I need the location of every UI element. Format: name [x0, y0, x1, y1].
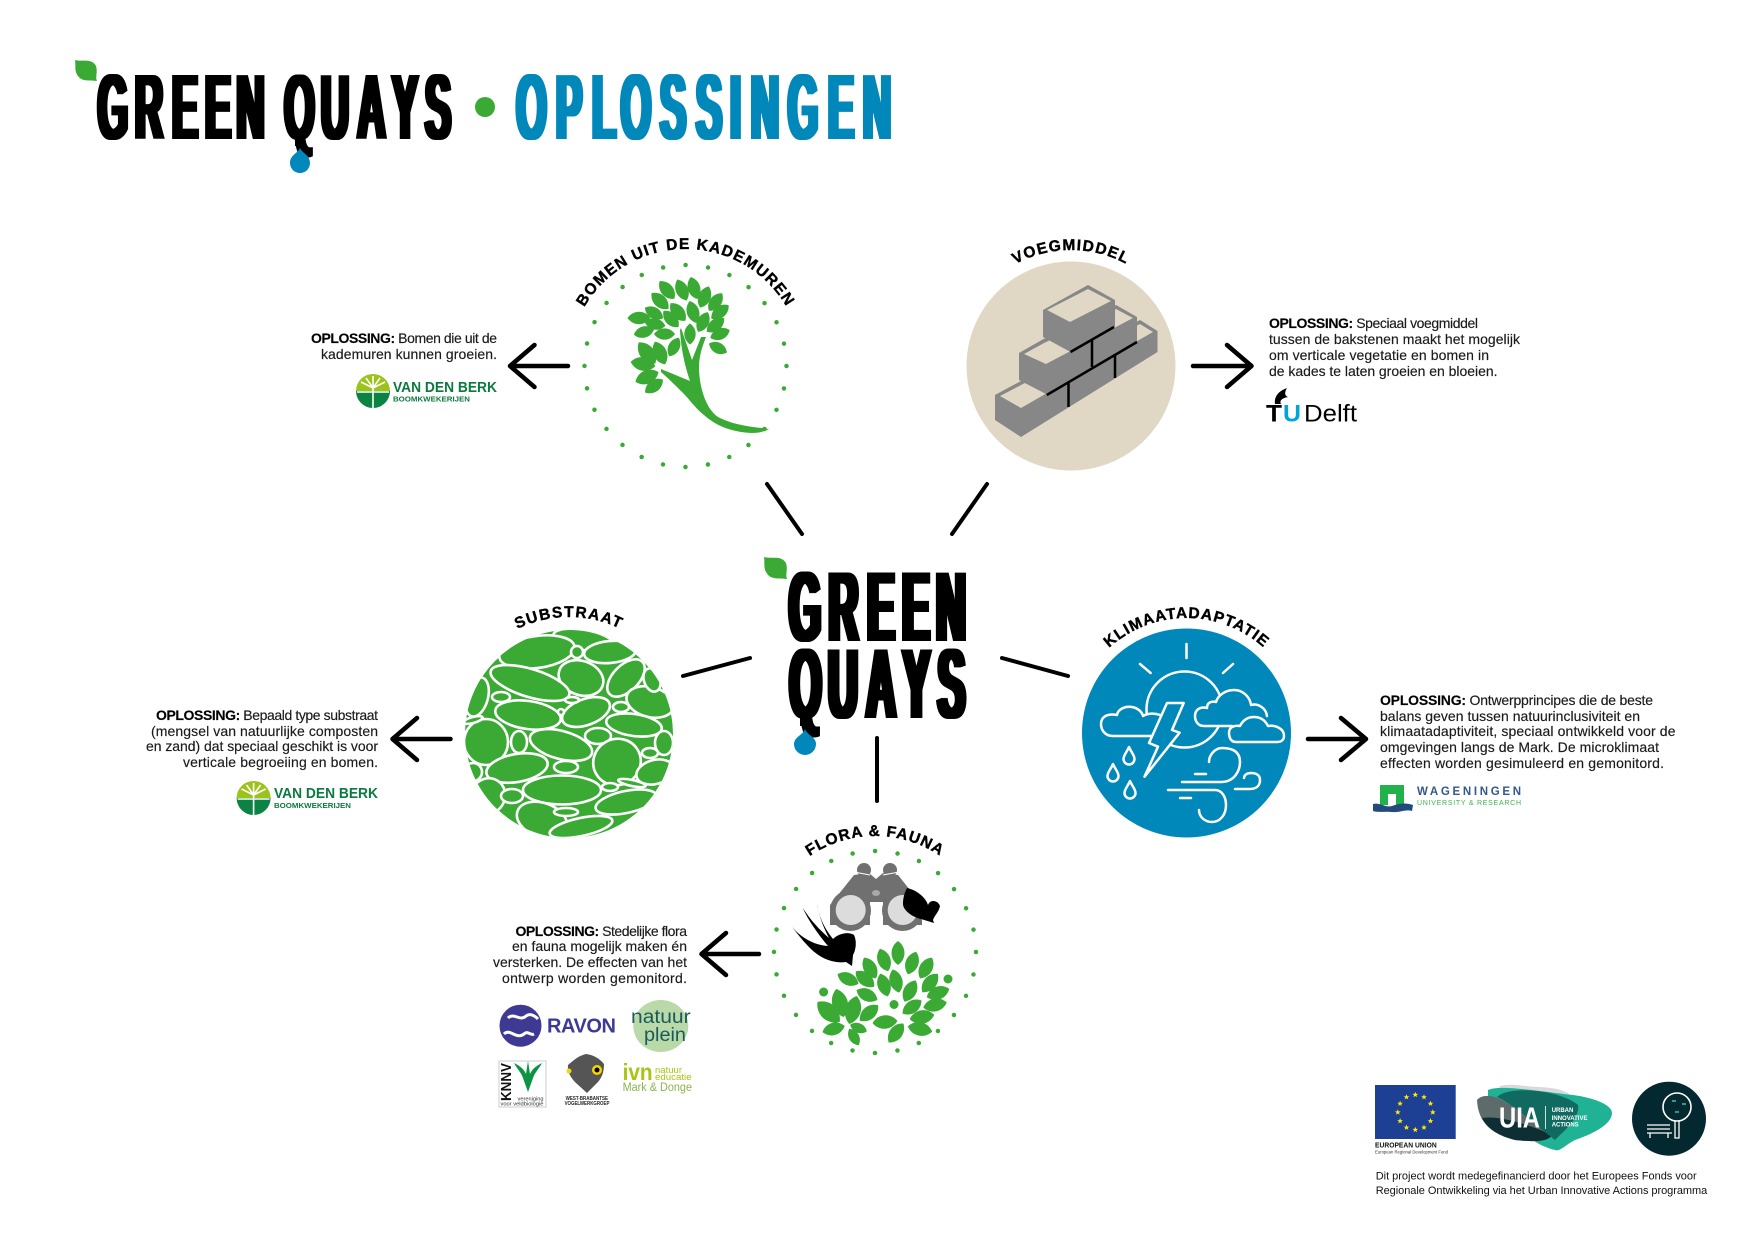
Q stem: [800, 716, 810, 726]
Q stem: [295, 137, 303, 146]
logo: Van den Berk: [356, 374, 497, 408]
icon: brick wall: [995, 285, 1158, 437]
icon: tree: [628, 275, 769, 433]
panel: voegmiddel: [966, 239, 1521, 470]
word: Green: GREEN: [789, 552, 966, 663]
footer text: Dit project wordt medegefinancierd door het Europees Fonds voor: [1376, 1170, 1697, 1182]
footer text: Regionale Ontwikkeling via het Urban Innovative Actions programma: [1376, 1185, 1708, 1197]
text block: kademuren kunnen groeien.: [321, 346, 497, 362]
logo: Wageningen: [1373, 785, 1521, 812]
text block: balans geven tussen natuurinclusiviteit en: [1380, 708, 1640, 724]
text block: [311, 330, 497, 362]
title: Green Quays Oplossingen: [75, 56, 891, 173]
heading: Oplossingen: OPLOSSINGEN: [516, 56, 891, 160]
logo: Natuurplein: plein: [644, 1025, 686, 1046]
text block: [1269, 315, 1521, 379]
text block: [146, 707, 378, 770]
logo: UIA: UIA: [1499, 1103, 1540, 1135]
heading: KLIMAATADAPTATIE: [1102, 607, 1270, 648]
heading: SUBSTRAAT: [514, 606, 624, 628]
arrow: [392, 718, 450, 760]
logo: tree and bench: [1632, 1082, 1706, 1156]
text block: en fauna mogelijk maken én: [512, 938, 687, 954]
logo: West-Brabantse Vogelwerkgroep: WEST-BRABANTSE: [566, 1096, 609, 1102]
icon: green leaf: [75, 60, 97, 81]
logo: West-Brabantse Vogelwerkgroep: [565, 1054, 610, 1107]
text block: de kades te laten groeien en bloeien.: [1269, 363, 1498, 379]
text block: [1380, 692, 1676, 771]
icon: butterfly: [903, 888, 940, 923]
logo: UIA: ACTIONS: [1552, 1123, 1579, 1129]
logo: IVN: ivn: [623, 1059, 653, 1085]
icon: swallow: [792, 901, 856, 966]
logo: UIA: INNOVATIVE: [1552, 1116, 1587, 1122]
logo: EU flag: European Regional Development Fund: [1375, 1149, 1448, 1154]
central logo: Green Quays: [764, 552, 966, 755]
text block: effecten worden gesimuleerd en gemonitord.: [1380, 755, 1664, 771]
text block: klimaatadaptiviteit, speciaal ontwikkeld voor de: [1380, 723, 1676, 739]
logo: IVN: natuur: [655, 1065, 682, 1075]
logo: UIA: URBAN: [1552, 1108, 1573, 1114]
icon: substrate stones: [461, 625, 677, 845]
text block: en zand) dat speciaal geschikt is voor: [146, 738, 378, 754]
logo: EU flag: EUROPEAN UNION: [1375, 1143, 1437, 1150]
icon: leaf: [764, 557, 787, 579]
logo: IVN: [623, 1059, 692, 1094]
footer: funders: [1375, 1082, 1708, 1197]
text block: OPLOSSING: Stedelijke flora: [516, 923, 687, 939]
logo: Natuurplein: [631, 1000, 691, 1052]
logo: Ravon: RAVON: [547, 1016, 616, 1038]
logo: Van den Berk: BOOMKWEKERIJEN: [393, 396, 470, 404]
logo: Van den Berk: VAN DEN BERK: [274, 785, 378, 802]
panel: bomen uit de kademuren: [311, 238, 795, 470]
text block: OPLOSSING: Bepaald type substraat: [156, 707, 378, 723]
text block: OPLOSSING: Bomen die uit de: [311, 330, 497, 346]
logo: TU Delft: U: [1283, 400, 1301, 428]
logo: TU Delft: Delft: [1304, 400, 1357, 428]
text block: omgevingen langs de Mark. De microklimaat: [1380, 739, 1659, 755]
logo: IVN: educatie: [655, 1072, 692, 1082]
text block: OPLOSSING: Ontwerpprincipes die de beste: [1380, 692, 1653, 708]
logo: TU Delft: T: [1266, 400, 1282, 428]
arrow: [1308, 718, 1366, 760]
text block: ontwerp worden gemonitord.: [502, 970, 687, 986]
word: Quays: QUAYS: [790, 629, 965, 740]
footer text: [1376, 1170, 1708, 1197]
logo: Ravon: [500, 1005, 616, 1047]
icon: weather: [1101, 644, 1284, 822]
logo: KNNV: vereniging: [518, 1097, 544, 1103]
arrow: [510, 345, 568, 387]
logo: KNNV: [498, 1061, 546, 1108]
logo: West-Brabantse Vogelwerkgroep: VOGELWERKGROEP: [565, 1101, 610, 1107]
text block: versterken. De effecten van het: [493, 954, 687, 970]
text block: (mengsel van natuurlijke composten: [151, 723, 378, 739]
text block: verticale begroeiing en bomen.: [183, 754, 378, 770]
logo: UIA: [1477, 1085, 1612, 1150]
text block: tussen de bakstenen maakt het mogelijk: [1269, 331, 1521, 347]
icon: binoculars: [830, 863, 923, 931]
heading: Green Quays: GREEN QUAYS: [98, 56, 451, 160]
logo: IVN: Mark & Donge: [623, 1082, 692, 1094]
logo: KNNV: voor veldbiologie: [500, 1102, 544, 1108]
logo: Van den Berk: BOOMKWEKERIJEN: [274, 803, 351, 810]
arrow: [1193, 345, 1252, 387]
blue circle: [1082, 628, 1291, 838]
icon: leaf bush: [812, 941, 952, 1048]
heading: VOEGMIDDEL: [1010, 239, 1126, 264]
heading: FLORA & FAUNA: [804, 825, 942, 856]
dotted ring: [584, 265, 786, 467]
heading: BOMEN UIT DE KADEMUREN: [576, 238, 795, 307]
icon: drop: [794, 729, 816, 755]
logo: Wageningen: WAGENINGEN: [1417, 786, 1521, 798]
dotted ring: [774, 851, 976, 1053]
logo: TU Delft: [1266, 388, 1357, 428]
panel: substraat: [146, 606, 673, 838]
panel: klimaatadaptatie: [1082, 607, 1676, 838]
logo: KNNV: KNNV: [498, 1063, 515, 1101]
logo: EU flag: [1375, 1085, 1456, 1154]
beige circle: [966, 262, 1176, 470]
logo: Natuurplein: natuur: [631, 1007, 691, 1028]
logo: Van den Berk: VAN DEN BERK: [393, 379, 497, 396]
green separator dot: [475, 97, 495, 117]
panel: flora en fauna: [493, 825, 978, 1108]
text block: [493, 923, 687, 986]
connector spokes: [683, 484, 1068, 801]
text block: OPLOSSING: Speciaal voegmiddel: [1269, 315, 1478, 331]
text block: om verticale vegetatie en bomen in: [1269, 347, 1489, 363]
icon: blue water drop: [290, 148, 310, 173]
logo: Van den Berk: [237, 781, 378, 815]
arrow: [702, 933, 759, 975]
logo: Wageningen: UNIVERSITY & RESEARCH: [1417, 800, 1521, 807]
